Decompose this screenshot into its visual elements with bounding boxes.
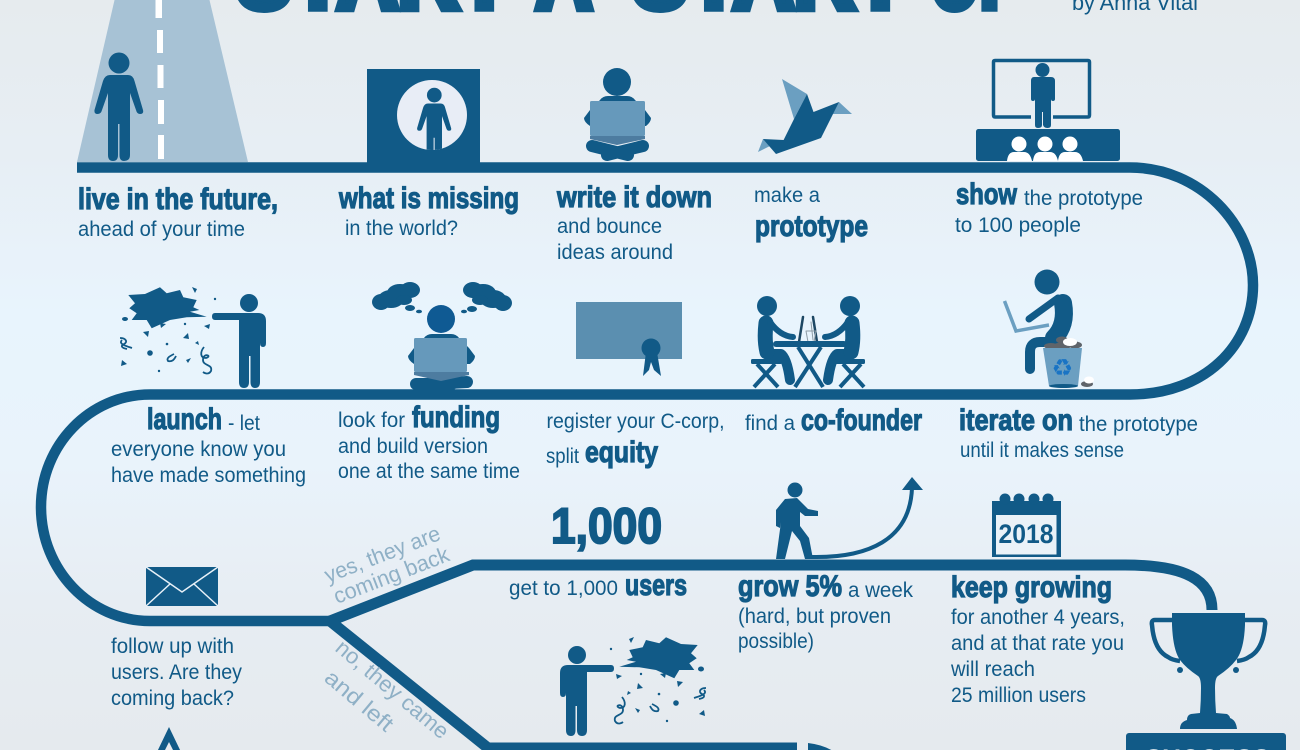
text: follow up with users [111,635,242,710]
icon: person with laptop [584,68,651,155]
text: write it down: and bounce [557,215,662,238]
icon: person with laptop and thought clouds [372,282,512,384]
big number: 1,000 [551,498,662,554]
text: get to 1,000 users [509,569,687,602]
text: find a co-founder [745,404,922,437]
success plaque [1126,733,1286,750]
text: iterate on the prototype [959,404,1198,462]
branch label: no: and left [320,665,399,737]
icon: 2018 calendar [992,494,1061,557]
text: register C-corp: split [546,445,579,468]
text: grow 5% a week: a week [848,579,913,602]
text: grow 5% a week [738,570,913,653]
text: look for funding: funding [412,401,500,434]
icon: person on recycle bin with laptop [1004,270,1094,388]
icon: person firing confetti [120,287,266,388]
icon: trophy [1152,613,1265,729]
icon: walking person with growth arrow [776,477,923,559]
title [236,0,1026,30]
text: grow 5% a week: grow 5% [738,570,842,603]
text: make a prototype [754,184,868,243]
icon: mirrored person firing confetti [560,637,706,736]
text: keep growing: will reach [950,658,1035,681]
step: iterate on the prototype [959,270,1198,462]
step: get to 1,000 users [509,498,687,602]
text: what is missing [338,182,519,240]
main path: winding road to success [41,168,1253,750]
text: write it down: write it down [556,181,712,214]
text: follow up with users: follow up with [111,635,234,658]
text: live in the future [78,183,278,241]
step: find a co-founder [745,296,922,437]
text: iterate on the prototype: iterate on [959,404,1073,437]
text: show the prototype [955,178,1143,237]
text: launch: - let [228,412,260,435]
step: register C-corp [546,302,724,469]
text: show the prototype: the prototype [1024,187,1143,210]
step: show the prototype [955,60,1143,237]
text: make a prototype: make a [754,184,820,207]
text: follow up with users: users. Are they [111,661,242,684]
text: grow 5% a week: (hard, but proven [738,605,891,628]
text: get to 1,000 users: get to 1,000 [509,577,618,600]
text: write it down [556,181,712,264]
step: follow up with users [111,567,242,710]
text: keep growing: 25 million users [951,684,1086,707]
text: iterate on the prototype: until it makes sense [960,439,1124,462]
text: iterate on the prototype: the prototype [1079,413,1198,436]
text: grow 5% a week: possible) [738,630,814,653]
branch label: no: no, they came [331,635,454,744]
text: launch: have made something [111,464,306,487]
branch label: yes: yes, they are [321,521,444,588]
text: what is missing: in the world? [345,217,458,240]
text: keep growing: keep growing [951,571,1112,604]
text: register C-corp: register your C-corp, [546,410,724,433]
text: keep growing [950,571,1125,707]
icon: envelope [146,567,218,606]
icon: person on recycle bin with laptop: ♻ [1052,354,1073,382]
text: look for funding: and build version [338,435,488,458]
step: make a prototype [754,79,868,243]
step: what is missing [338,69,519,240]
step: launch [111,287,306,487]
text: show the prototype: to 100 people [955,214,1081,237]
text: look for funding: one at the same time [338,460,520,483]
text: what is missing: what is missing [338,182,519,215]
text: keep growing: for another 4 years, [951,606,1125,629]
text: show the prototype: show [956,178,1018,211]
text: keep growing: and at that rate you [951,632,1124,655]
text: get to 1,000 users: users [625,569,687,602]
text: register C-corp: equity [585,436,658,469]
step: grow 5% a week [738,477,923,653]
icon: person on road [94,52,143,161]
icon: presenter on stage with audience [976,60,1120,161]
text: launch [111,403,306,487]
icon: rocket tip [157,727,181,750]
text: look for funding [338,401,520,483]
icon: road [77,0,248,162]
text: make a prototype: prototype [755,210,868,243]
step: look for funding [338,282,520,483]
text: look for funding: look for [338,409,405,432]
icon: two founders at table [751,296,865,387]
text: launch: launch [147,403,222,436]
text: find a co-founder: co-founder [801,404,922,437]
step: keep growing [950,494,1125,707]
text: write it down: ideas around [557,241,673,264]
branch label: yes: coming back [330,541,454,609]
icon: certificate with seal [576,302,682,376]
text: find a co-founder: find a [745,412,795,435]
text: register C-corp [546,410,724,469]
text: live in the future: live in the future, [78,183,278,216]
text: live in the future: ahead of your time [78,218,245,241]
step: live in the future [78,52,278,241]
text: follow up with users: coming back? [111,687,234,710]
icon: 2018 calendar: 2018 [998,519,1054,549]
text: launch: everyone know you [111,438,286,461]
icon: window with person [367,69,480,164]
icon: origami bird [758,79,852,154]
step: write it down [556,68,712,264]
